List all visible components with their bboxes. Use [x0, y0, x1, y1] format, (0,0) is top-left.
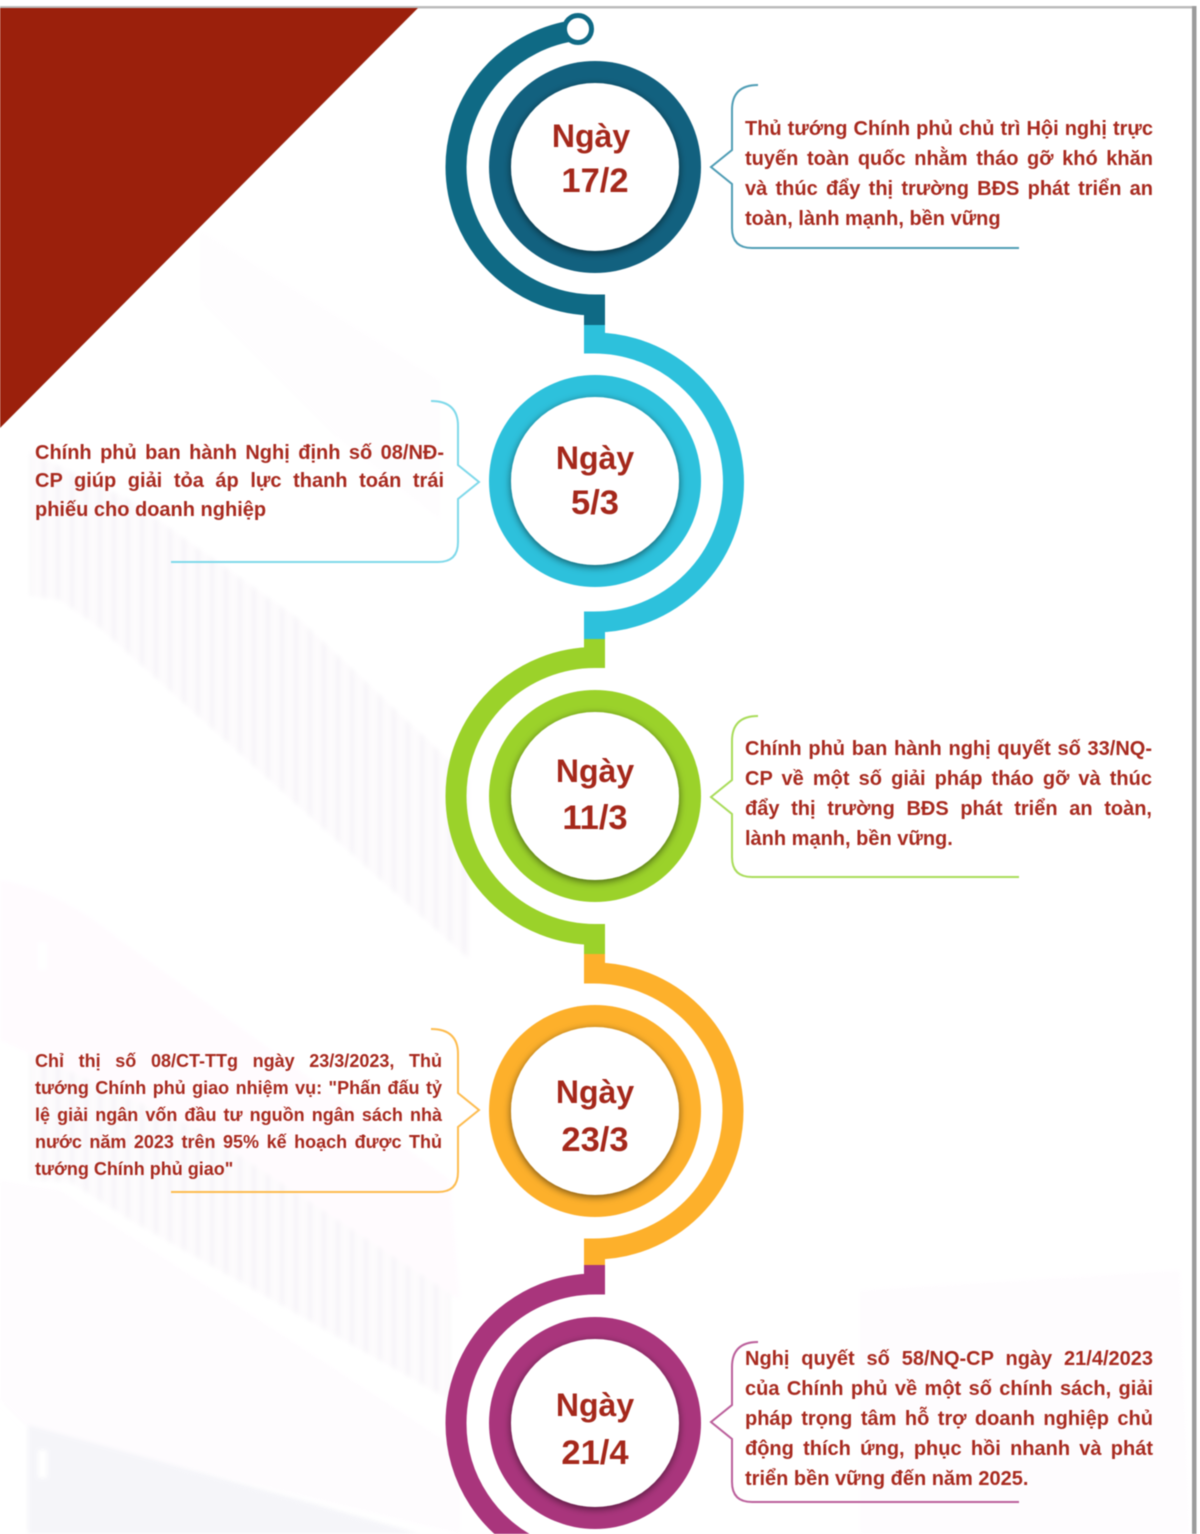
text block: 23/3: tướng Chính phủ giao" [35, 1158, 233, 1178]
connector arc: cyan [584, 343, 734, 622]
red corner triangle [0, 8, 418, 428]
text block: 17/2: và thúc đẩy thị trường BĐS phát triển an [745, 178, 1153, 200]
timeline node 2: cyan [489, 325, 734, 640]
ring: green [489, 690, 701, 902]
date label: 11/3: 11/3 [562, 799, 628, 837]
text block: 21/4: Nghị quyết số 58/NQ-CP ngày 21/4/2023 [745, 1348, 1153, 1370]
date label: 23/3: Ngày [556, 1074, 634, 1110]
date label: 5/3: 5/3 [571, 484, 619, 522]
text block: 23/3: Chỉ thị số 08/CT-TTg ngày 23/3/2023, Thủ [35, 1050, 442, 1070]
date label: 17/2 [552, 118, 630, 200]
callout bracket 2 [171, 401, 479, 562]
text block: 23/3 [34, 1050, 443, 1180]
date label: 17/2: Ngày [552, 118, 630, 154]
ring: purple [489, 1317, 701, 1529]
text block: 21/4: của Chính phủ về một số chính sách, giải [745, 1378, 1153, 1400]
ring: cyan [489, 375, 701, 587]
text block: 23/3: lệ giải ngân vốn đầu tư nguồn ngân sách nhà [35, 1104, 442, 1124]
text block: 23/3: nước năm 2023 trên 95% kế hoạch được Thủ [35, 1132, 442, 1152]
callout bracket 5 [711, 1342, 1019, 1502]
ring: teal [489, 61, 701, 273]
date label: 5/3: Ngày [556, 440, 634, 476]
connector arc: green [456, 658, 605, 934]
text block: 21/4: pháp trọng tâm hỗ trợ doanh nghiệp chủ [745, 1408, 1153, 1430]
text block: 11/3 [745, 738, 1152, 850]
text block: 17/2: tuyến toàn quốc nhằm tháo gỡ khó khăn [745, 148, 1153, 170]
date label: 11/3: Ngày [556, 753, 634, 789]
text block: 11/3: Chính phủ ban hành nghị quyết số 33/NQ- [745, 738, 1152, 760]
text block: 17/2: Thủ tướng Chính phủ chủ trì Hội nghị trực [745, 118, 1153, 140]
date label: 21/4: Ngày [556, 1387, 634, 1423]
text block: 11/3: lành mạnh, bền vững. [745, 828, 953, 850]
text block: 21/4: động thích ứng, phục hồi nhanh và phát [745, 1438, 1153, 1460]
text block: 11/3: CP về một số giải pháp tháo gỡ và thúc [745, 768, 1152, 790]
text block: 23/3: tướng Chính phủ giao nhiệm vụ: "Phấn đấu tỷ [35, 1078, 442, 1098]
text block: 5/3: Chính phủ ban hành Nghị định số 08/NĐ- [35, 442, 444, 464]
connector arc: teal [456, 30, 605, 305]
date label: 21/4: 21/4 [561, 1434, 629, 1472]
connector arc: purple [456, 1284, 605, 1534]
text block: 21/4 [744, 1348, 1154, 1490]
connector arc: orange [584, 973, 733, 1249]
text block: 5/3 [35, 442, 444, 521]
text block: 17/2: toàn, lành mạnh, bền vững [745, 208, 1001, 230]
timeline node 5: purple [456, 1265, 701, 1534]
date label: 21/4 [556, 1387, 634, 1472]
timeline node 3: green [456, 639, 701, 954]
date label: 23/3 [556, 1074, 634, 1159]
text block: 17/2 [744, 118, 1153, 230]
text block: 5/3: phiếu cho doanh nghiệp [35, 499, 266, 521]
timeline node 4: orange [489, 954, 733, 1265]
callout bracket 3 [711, 716, 1019, 877]
date label: 23/3: 23/3 [561, 1121, 629, 1159]
text block: 5/3: CP giúp giải tỏa áp lực thanh toán trái [35, 470, 444, 492]
text block: 11/3: đẩy thị trường BĐS phát triển an toàn, [745, 798, 1152, 820]
timeline node 1: teal [456, 16, 701, 325]
date label: 5/3 [556, 440, 634, 522]
callout bracket 4 [171, 1029, 479, 1192]
start marker [564, 16, 592, 42]
ring: orange [489, 1005, 701, 1217]
date label: 17/2: 17/2 [561, 162, 629, 200]
text block: 21/4: triển bền vững đến năm 2025. [745, 1468, 1028, 1490]
date label: 11/3 [556, 753, 634, 837]
callout bracket 1 [711, 85, 1019, 248]
